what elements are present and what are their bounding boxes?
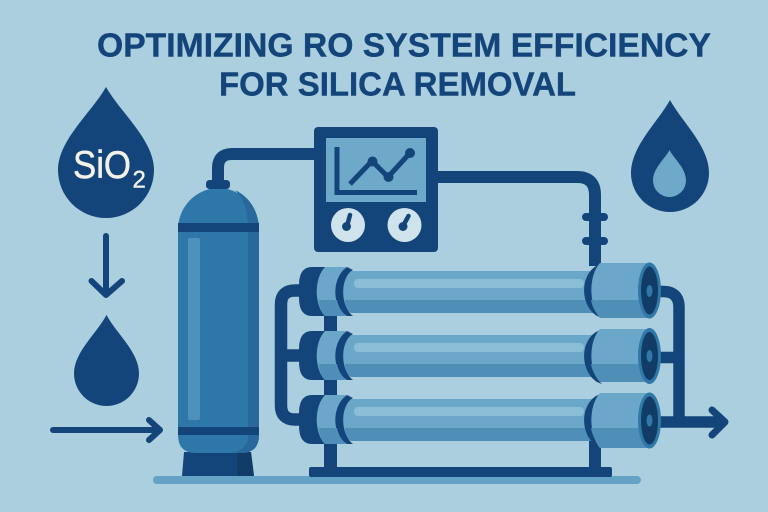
membrane vessel 2: [299, 328, 661, 384]
tank cap: [206, 180, 230, 189]
ground line: [153, 476, 641, 484]
arrow: feed into tank: [53, 420, 160, 440]
frame base and supports: [309, 310, 612, 477]
icon: SiO2 water drop: 2: [132, 166, 146, 194]
pipe: left feed manifold: [281, 290, 302, 420]
arrow: down from SiO2 to clean drop: [92, 236, 122, 295]
pipe: monitor to membrane vessels: [436, 177, 608, 266]
monitor screen: [326, 138, 426, 202]
tank body: [178, 188, 259, 453]
gauge right: [388, 208, 422, 242]
icon: purified water drop: [631, 100, 709, 212]
pipe: right permeate outlet with arrow: [654, 292, 725, 435]
title: OPTIMIZING RO SYSTEM EFFICIENCY: [97, 28, 711, 64]
title: FOR SILICA REMOVAL: [219, 66, 576, 104]
membrane vessel 1: [299, 262, 661, 318]
pressure tank: [178, 180, 259, 476]
icon: reduced drop: [74, 315, 139, 406]
icon: SiO2 water drop: SiO: [73, 144, 131, 187]
tank base: [182, 452, 254, 476]
title: [97, 28, 711, 104]
monitor: [314, 127, 438, 252]
line chart: [337, 147, 417, 192]
pipe: tank to monitor: [218, 154, 316, 182]
membrane vessel 3: [299, 392, 661, 448]
icon: SiO2 water drop: [58, 87, 154, 218]
gauge left: [331, 208, 365, 242]
